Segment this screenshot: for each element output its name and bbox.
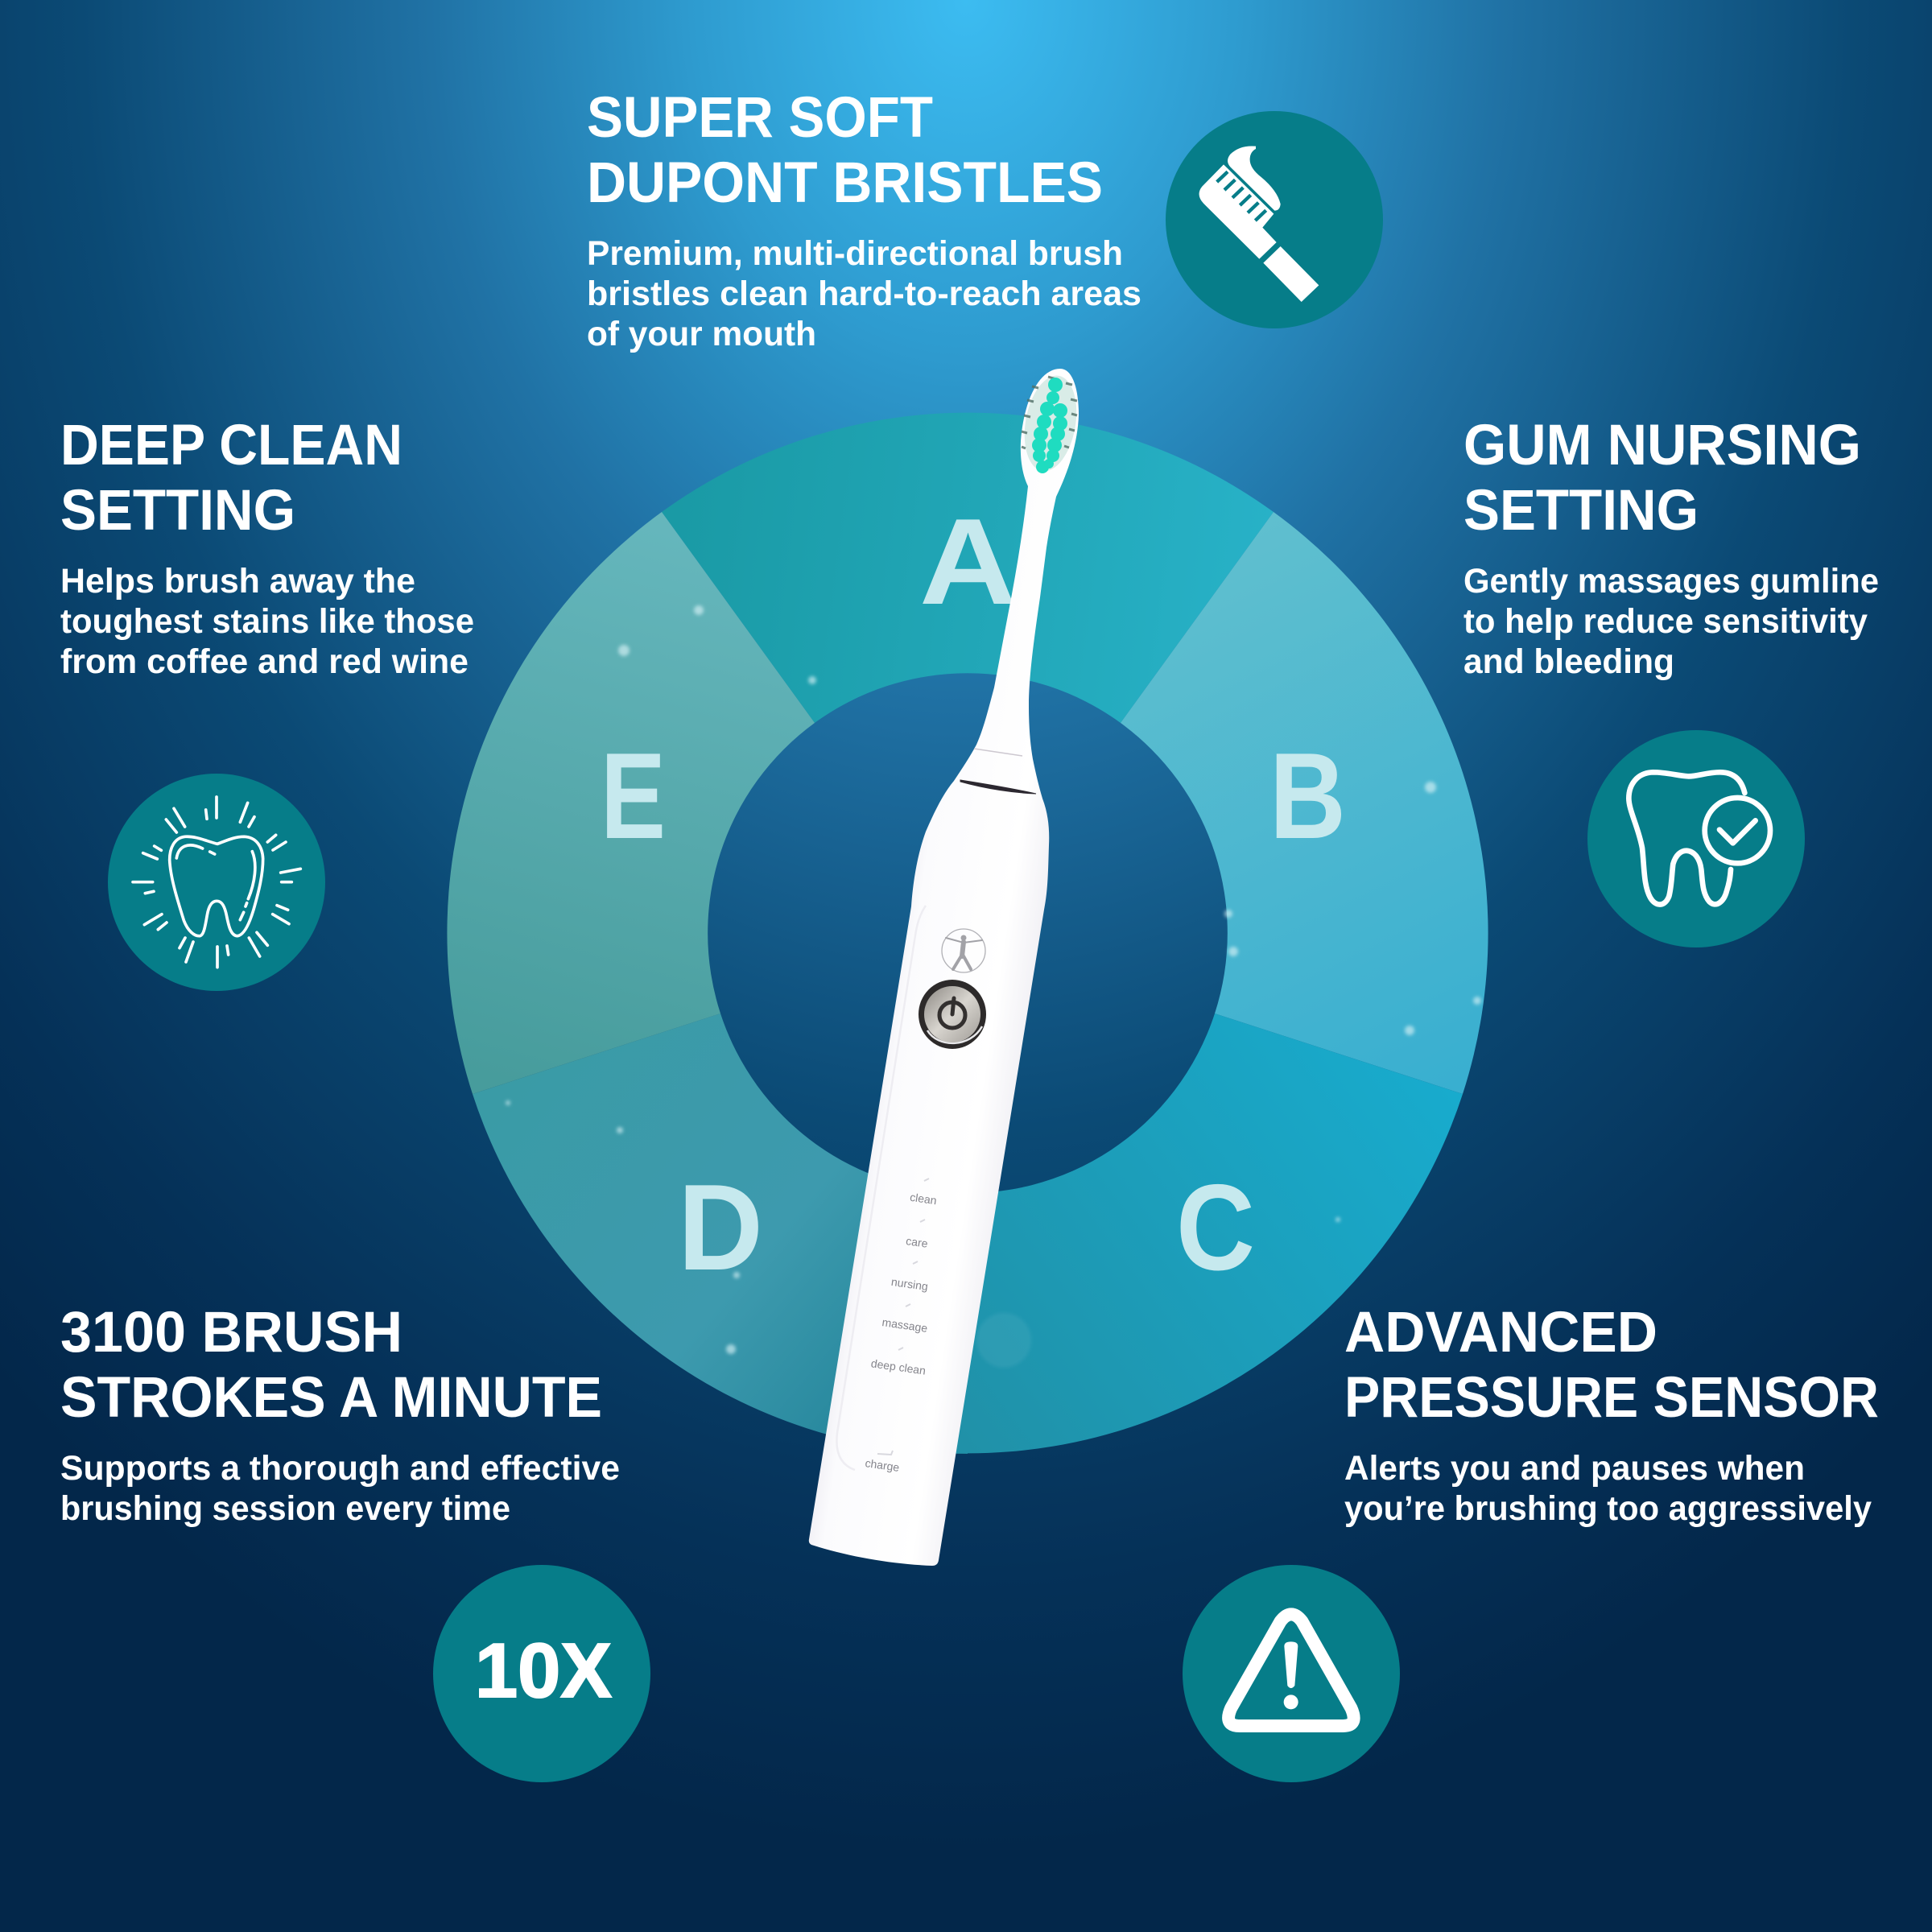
letter E: E <box>601 728 666 865</box>
heading: GUM NURSING <box>1463 414 1861 477</box>
heading: DEEP CLEAN <box>60 414 402 477</box>
mode labels: nursing <box>890 1275 929 1293</box>
brush head bristles <box>1018 372 1084 475</box>
description: you’re brushing too aggressively <box>1344 1489 1872 1528</box>
letter A: A <box>919 493 1017 630</box>
description <box>1344 1449 1872 1528</box>
toothbrush <box>809 369 1084 1566</box>
vitruvian logo <box>942 929 985 972</box>
letter C: C <box>1176 1159 1255 1296</box>
heading: SETTING <box>60 479 295 543</box>
feature: advanced pressure sensor <box>1183 1301 1879 1782</box>
brush handle and neck <box>809 369 1079 1566</box>
description: Premium, multi-directional brush <box>587 234 1123 273</box>
description: bristles clean hard-to-reach areas <box>587 275 1141 313</box>
feature: deep clean setting <box>60 414 474 991</box>
description <box>1463 562 1879 681</box>
icon: 10X badge: 10X <box>475 1628 612 1714</box>
heading <box>587 86 1103 215</box>
heading <box>60 1301 602 1430</box>
icon: toothbrush with paste <box>1166 111 1383 328</box>
icon: 10X badge <box>433 1565 650 1782</box>
description <box>60 562 474 681</box>
heading: DUPONT BRISTLES <box>587 151 1103 215</box>
segment A <box>662 413 1274 723</box>
control panel outline <box>836 906 926 1470</box>
heading: STROKES A MINUTE <box>60 1366 602 1430</box>
segment B <box>1121 512 1488 1094</box>
description: toughest stains like those <box>60 602 474 641</box>
mode labels <box>865 1179 938 1474</box>
neck collar line <box>974 749 1022 756</box>
heading: SETTING <box>1463 479 1699 543</box>
segment C <box>923 1013 1463 1453</box>
description <box>60 1449 620 1528</box>
description: Gently massages gumline <box>1463 562 1879 601</box>
feature: gum nursing setting <box>1463 414 1879 947</box>
feature: 3100 brush strokes <box>60 1301 650 1782</box>
icon: tooth with check <box>1587 730 1805 947</box>
mode labels: clean <box>909 1191 938 1207</box>
segment D <box>473 1013 968 1454</box>
description: Alerts you and pauses when <box>1344 1449 1805 1488</box>
description: Helps brush away the <box>60 562 415 601</box>
feature: super soft dupont bristles <box>587 86 1383 353</box>
water bubbles <box>506 605 1481 1368</box>
description: and bleeding <box>1463 642 1674 681</box>
letter D: D <box>678 1159 763 1296</box>
mode labels: massage <box>881 1315 928 1335</box>
mode labels: care <box>905 1234 929 1250</box>
heading: ADVANCED <box>1344 1301 1657 1364</box>
heading <box>1344 1301 1879 1430</box>
heading: SUPER SOFT <box>587 86 933 150</box>
description: from coffee and red wine <box>60 642 469 681</box>
mode labels: deep clean <box>870 1356 927 1377</box>
segment E <box>447 512 815 1094</box>
description: Supports a thorough and effective <box>60 1449 620 1488</box>
heading: 3100 BRUSH <box>60 1301 402 1364</box>
description: of your mouth <box>587 315 816 353</box>
description <box>587 234 1141 353</box>
power button <box>919 980 986 1049</box>
head separator slit <box>960 780 1036 794</box>
icon: sparkling tooth <box>108 774 325 991</box>
description: to help reduce sensitivity <box>1463 602 1868 641</box>
mode labels: charge <box>865 1456 901 1474</box>
heading <box>1463 414 1861 543</box>
heading: PRESSURE SENSOR <box>1344 1366 1879 1430</box>
heading <box>60 414 402 543</box>
icon: warning triangle <box>1183 1565 1400 1782</box>
description: brushing session every time <box>60 1489 510 1528</box>
letter B: B <box>1269 728 1346 865</box>
ring diagram <box>447 413 1488 1454</box>
